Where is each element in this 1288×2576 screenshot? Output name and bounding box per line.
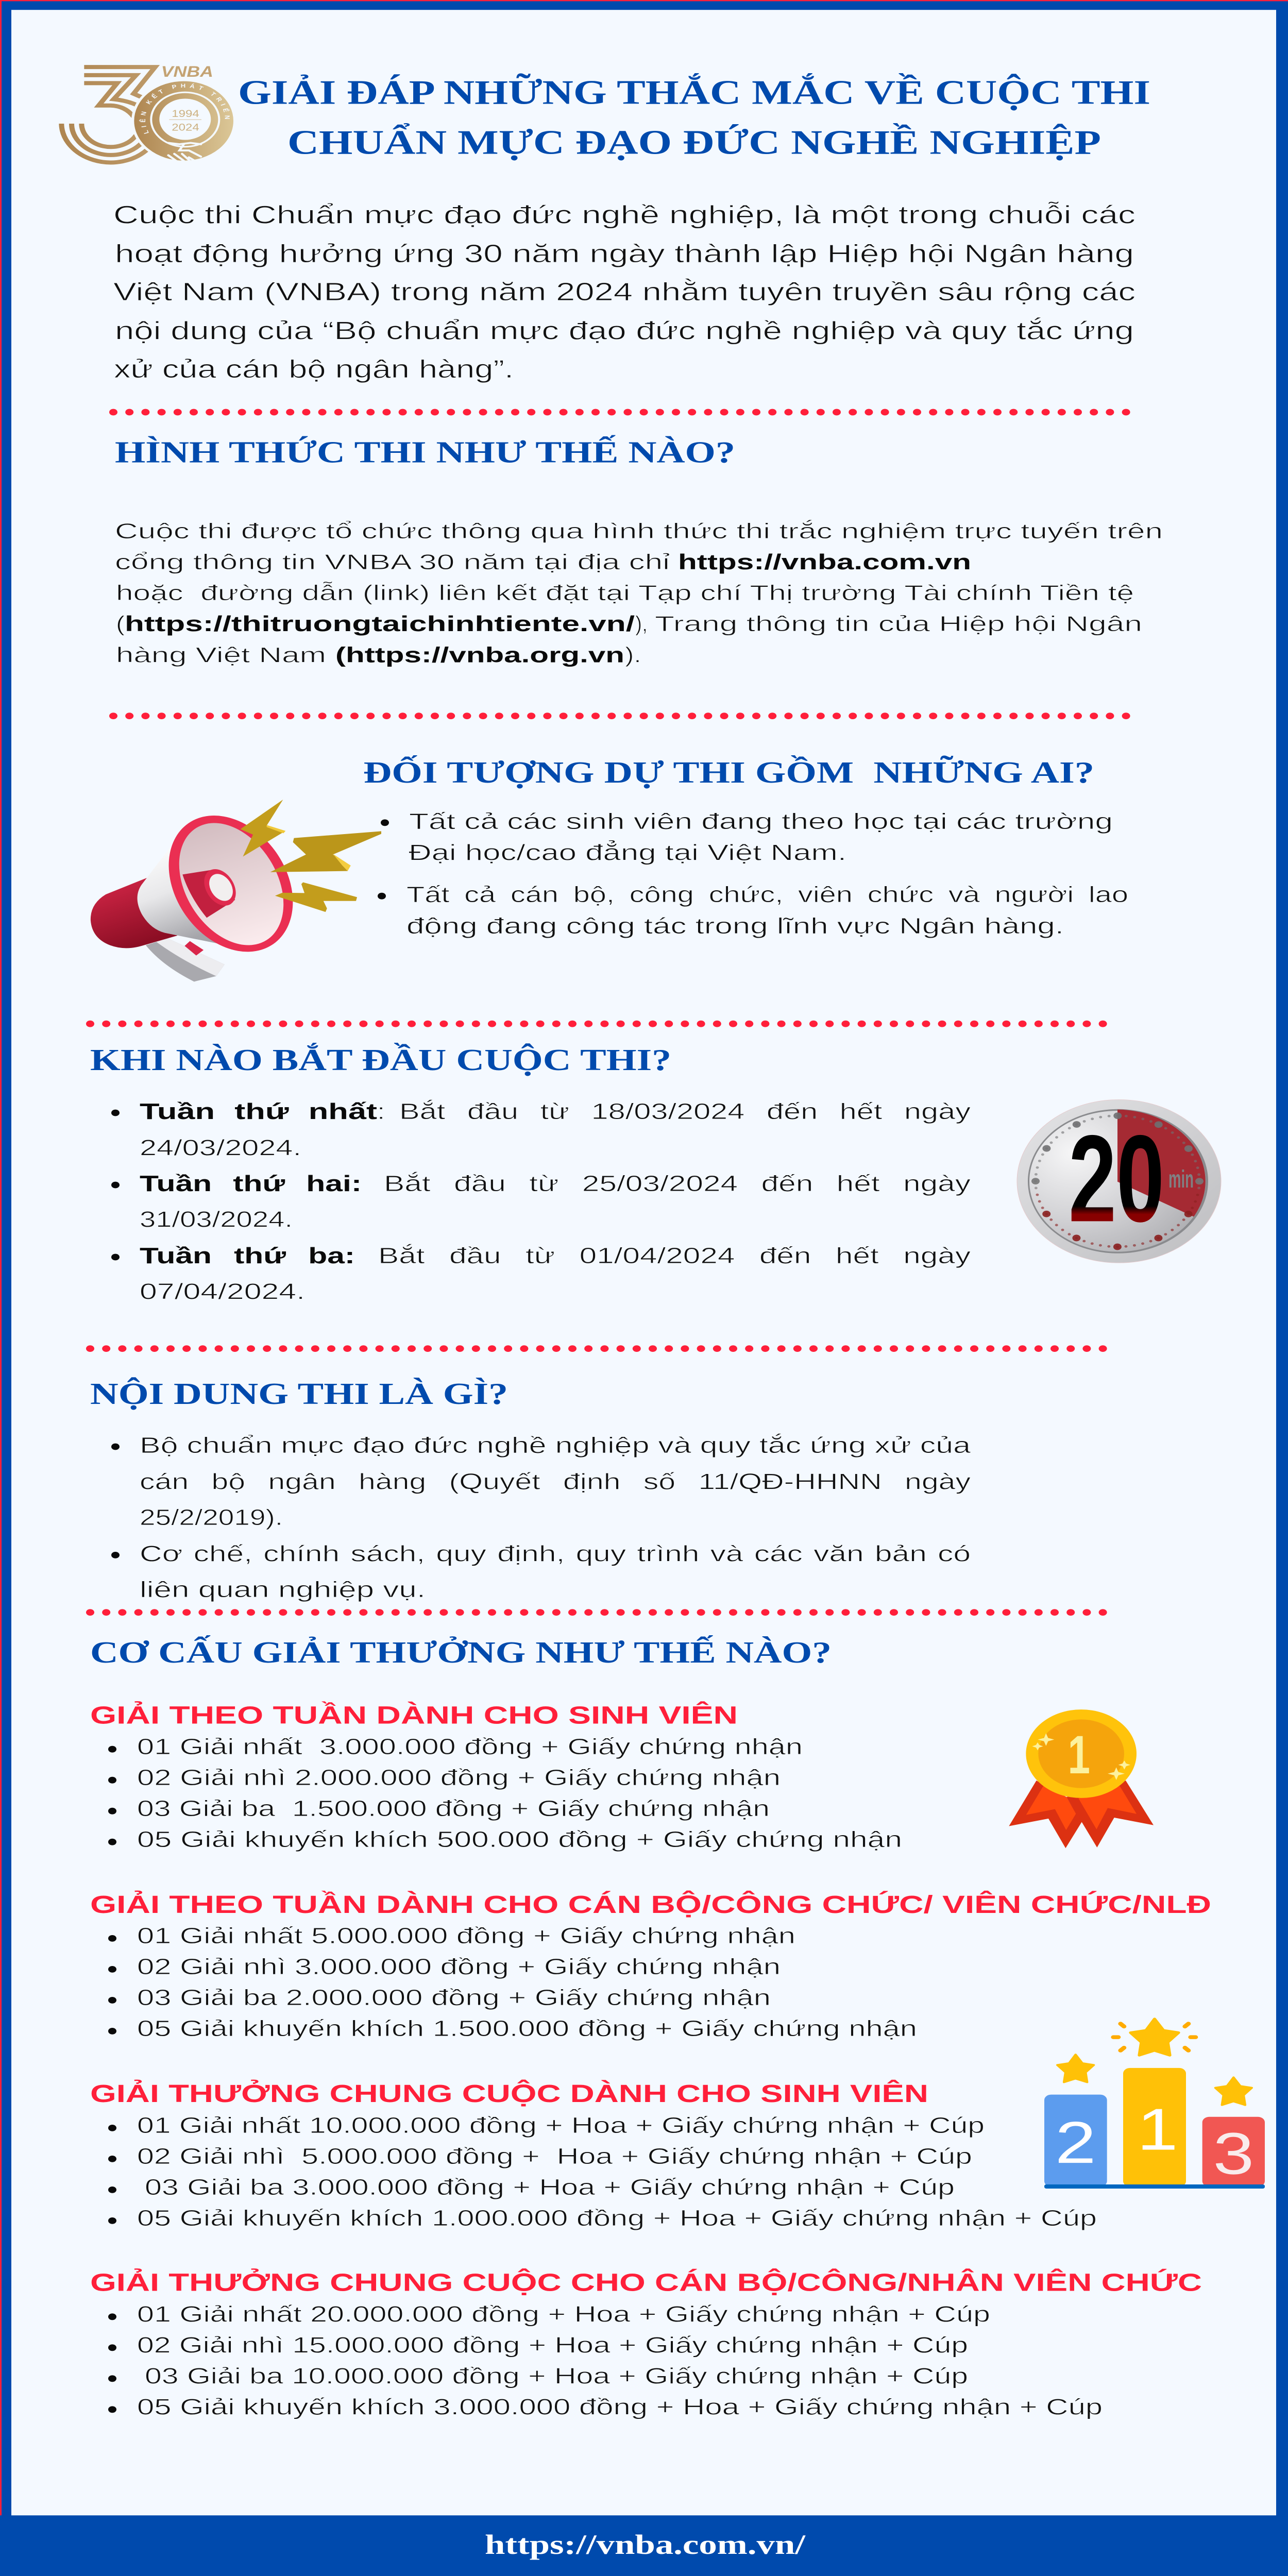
text block: schedule: 24/03/2024. (140, 1135, 301, 1160)
text block: exam content: cán bộ ngân hàng (Quyết định số 11/QĐ-HHNN ngày (140, 1469, 971, 1494)
prize group: weekly students: GIẢI THEO TUẦN DÀNH CHO SINH VIÊN (90, 1701, 738, 1729)
prize group: final staff: GIẢI THƯỞNG CHUNG CUỘC CHO CÁN BỘ/CÔNG/NHÂN VIÊN CHỨC (90, 2268, 1202, 2296)
text block: exam content: Cơ chế, chính sách, quy định, quy trình và các văn bản có (140, 1541, 971, 1566)
text block: exam format (115, 519, 1163, 667)
footer bar with URL: https://vnba.com.vn/ (485, 2529, 806, 2560)
prize group: final students: 01 Giải nhất 10.000.000 đồng + Hoa + Giấy chứng nhận + Cúp (137, 2112, 985, 2138)
text block: exam format: ( (116, 612, 125, 636)
prize group: weekly staff: 05 Giải khuyến khích 1.500.000 đồng + Giấy chứng nhận (137, 2015, 917, 2041)
text block: schedule: 07/04/2024. (140, 1279, 305, 1304)
text block: exam format: cổng thông tin VNBA 30 năm tại địa chỉ (115, 550, 670, 574)
prize group: final staff: 01 Giải nhất 20.000.000 đồng + Hoa + Giấy chứng nhận + Cúp (137, 2301, 990, 2327)
prize group: weekly students: 02 Giải nhì 2.000.000 đồng + Giấy chứng nhận (137, 1765, 781, 1790)
text block: exam content: 25/2/2019). (140, 1504, 283, 1530)
prize group: weekly staff: GIẢI THEO TUẦN DÀNH CHO CÁN BỘ/CÔNG CHỨC/ VIÊN CHỨC/NLĐ (90, 1891, 1211, 1918)
text block: schedule: : (377, 1098, 385, 1124)
text block: exam format: ), (635, 612, 648, 636)
prize group: weekly staff (90, 1891, 1211, 2041)
prize group: weekly staff: 02 Giải nhì 3.000.000 đồng + Giấy chứng nhận (137, 1954, 781, 1979)
text block: schedule: Bắt đầu từ 01/04/2024 đến hết ngày (378, 1243, 971, 1268)
text block: schedule (111, 1098, 971, 1304)
prize group: final students: 03 Giải ba 3.000.000 đồng + Hoa + Giấy chứng nhận + Cúp (145, 2174, 955, 2200)
text block: exam format: ). (625, 643, 641, 667)
prize group: final students (90, 2080, 1097, 2231)
icon: podium with stars: 3 (1213, 2121, 1254, 2187)
text block: schedule: Bắt đầu từ 18/03/2024 đến hết ngày (399, 1098, 971, 1124)
icon: podium with stars: 1 (1137, 2096, 1178, 2162)
text block: exam format: hoặc đường dẫn (link) liên kết đặt tại Tạp chí Thị trường Tài chính Tiền tệ (116, 581, 1134, 605)
icon: VNBA 30 logo (59, 63, 233, 165)
text block: schedule: Tuần thứ hai: (140, 1171, 362, 1196)
heading: who: ĐỐI TƯỢNG DỰ THI GỒM NHỮNG AI? (363, 755, 1094, 789)
icon: gold medal (1009, 1709, 1154, 1848)
icon: VNBA 30 logo: 2024 (172, 122, 199, 133)
prize group: weekly students: 05 Giải khuyến khích 500.000 đồng + Giấy chứng nhận (137, 1826, 902, 1852)
prize group: final staff: 03 Giải ba 10.000.000 đồng + Hoa + Giấy chứng nhận + Cúp (145, 2363, 968, 2388)
intro paragraph (113, 200, 1136, 383)
text block: exam format: (https://vnba.org.vn (335, 643, 624, 667)
text block: participants: Tất cả cán bộ, công chức, viên chức và người lao (406, 882, 1128, 907)
text block: participants: Đại học/cao đẳng tại Việt Nam. (409, 839, 846, 865)
icon: VNBA 30 logo: LIÊN KẾT PHÁT TRIỂN (139, 83, 230, 134)
title: CHUẨN MỰC ĐẠO ĐỨC NGHỀ NGHIỆP (287, 123, 1101, 161)
icon: podium with stars: 2 (1055, 2110, 1096, 2176)
prize group: final students: 02 Giải nhì 5.000.000 đồng + Hoa + Giấy chứng nhận + Cúp (137, 2143, 972, 2169)
text block: participants: Tất cả các sinh viên đang theo học tại các trường (409, 808, 1113, 834)
text block: exam format: Trang thông tin của Hiệp hội Ngân (655, 612, 1142, 636)
heading: content: NỘI DUNG THI LÀ GÌ? (90, 1377, 508, 1411)
prize group: final staff: 02 Giải nhì 15.000.000 đồng + Hoa + Giấy chứng nhận + Cúp (137, 2332, 968, 2358)
intro paragraph: Cuộc thi Chuẩn mực đạo đức nghề nghiệp, là một trong chuỗi các (113, 200, 1136, 229)
icon: VNBA 30 logo: 1994 (172, 108, 199, 120)
title: GIẢI ĐÁP NHỮNG THẮC MẮC VỀ CUỘC THI (238, 73, 1150, 112)
icon: megaphone (91, 800, 381, 981)
prize group: final students: 05 Giải khuyến khích 1.000.000 đồng + Hoa + Giấy chứng nhận + Cúp (137, 2205, 1097, 2231)
heading: when: KHI NÀO BẮT ĐẦU CUỘC THI? (90, 1042, 671, 1077)
text block: schedule: Bắt đầu từ 25/03/2024 đến hết ngày (384, 1171, 971, 1196)
heading: prizes: CƠ CẤU GIẢI THƯỞNG NHƯ THẾ NÀO? (90, 1635, 832, 1669)
text block: exam content (111, 1432, 971, 1602)
text block: exam content: Bộ chuẩn mực đạo đức nghề nghiệp và quy tắc ứng xử của (140, 1432, 971, 1458)
text block: schedule: Tuần thứ nhất (140, 1098, 377, 1124)
intro paragraph: hoạt động hưởng ứng 30 năm ngày thành lập Hiệp hội Ngân hàng (115, 240, 1134, 267)
text block: exam format: https://thitruongtaichinhtiente.vn/ (125, 612, 635, 636)
prize group: final staff: 05 Giải khuyến khích 3.000.000 đồng + Hoa + Giấy chứng nhận + Cúp (137, 2394, 1103, 2419)
icon: VNBA 30 logo: VNBA (161, 63, 213, 80)
prize group: weekly students (90, 1701, 902, 1852)
icon: 20 min timer: min (1168, 1165, 1194, 1193)
icon: 20 min timer (1017, 1099, 1221, 1263)
prize group: final students: GIẢI THƯỞNG CHUNG CUỘC DÀNH CHO SINH VIÊN (90, 2080, 928, 2108)
footer bar with URL (0, 2515, 1288, 2576)
prize group: weekly students: 03 Giải ba 1.500.000 đồng + Giấy chứng nhận (137, 1795, 770, 1821)
text block: participants (378, 808, 1128, 939)
prize group: weekly staff: 03 Giải ba 2.000.000 đồng + Giấy chứng nhận (137, 1985, 771, 2010)
intro paragraph: xử của cán bộ ngân hàng”. (114, 355, 514, 383)
prize group: final staff (90, 2268, 1202, 2419)
text block: participants: động đang công tác trong lĩnh vực Ngân hàng. (406, 913, 1064, 939)
prize group: weekly staff: 01 Giải nhất 5.000.000 đồng + Giấy chứng nhận (137, 1923, 795, 1948)
text block: schedule: 31/03/2024. (140, 1207, 293, 1232)
text block: exam format: https://vnba.com.vn (678, 550, 971, 574)
title (238, 73, 1150, 161)
icon: podium with stars (1044, 2019, 1265, 2189)
text block: schedule: Tuần thứ ba: (140, 1243, 355, 1268)
intro paragraph: Việt Nam (VNBA) trong năm 2024 nhằm tuyên truyền sâu rộng các (113, 278, 1136, 306)
prize group: weekly students: 01 Giải nhất 3.000.000 đồng + Giấy chứng nhận (137, 1734, 803, 1759)
icon: 20 min timer: 20 (1069, 1109, 1164, 1248)
text block: exam content: liên quan nghiệp vụ. (140, 1577, 426, 1602)
intro paragraph: nội dung của “Bộ chuẩn mực đạo đức nghề nghiệp và quy tắc ứng (115, 316, 1134, 345)
icon: gold medal: 1 (1068, 1725, 1090, 1785)
text block: exam format: hàng Việt Nam (116, 643, 326, 667)
heading: how: HÌNH THỨC THI NHƯ THẾ NÀO? (115, 435, 735, 469)
text block: exam format: Cuộc thi được tổ chức thông qua hình thức thi trắc nghiệm trực tuyến trên (115, 519, 1163, 543)
